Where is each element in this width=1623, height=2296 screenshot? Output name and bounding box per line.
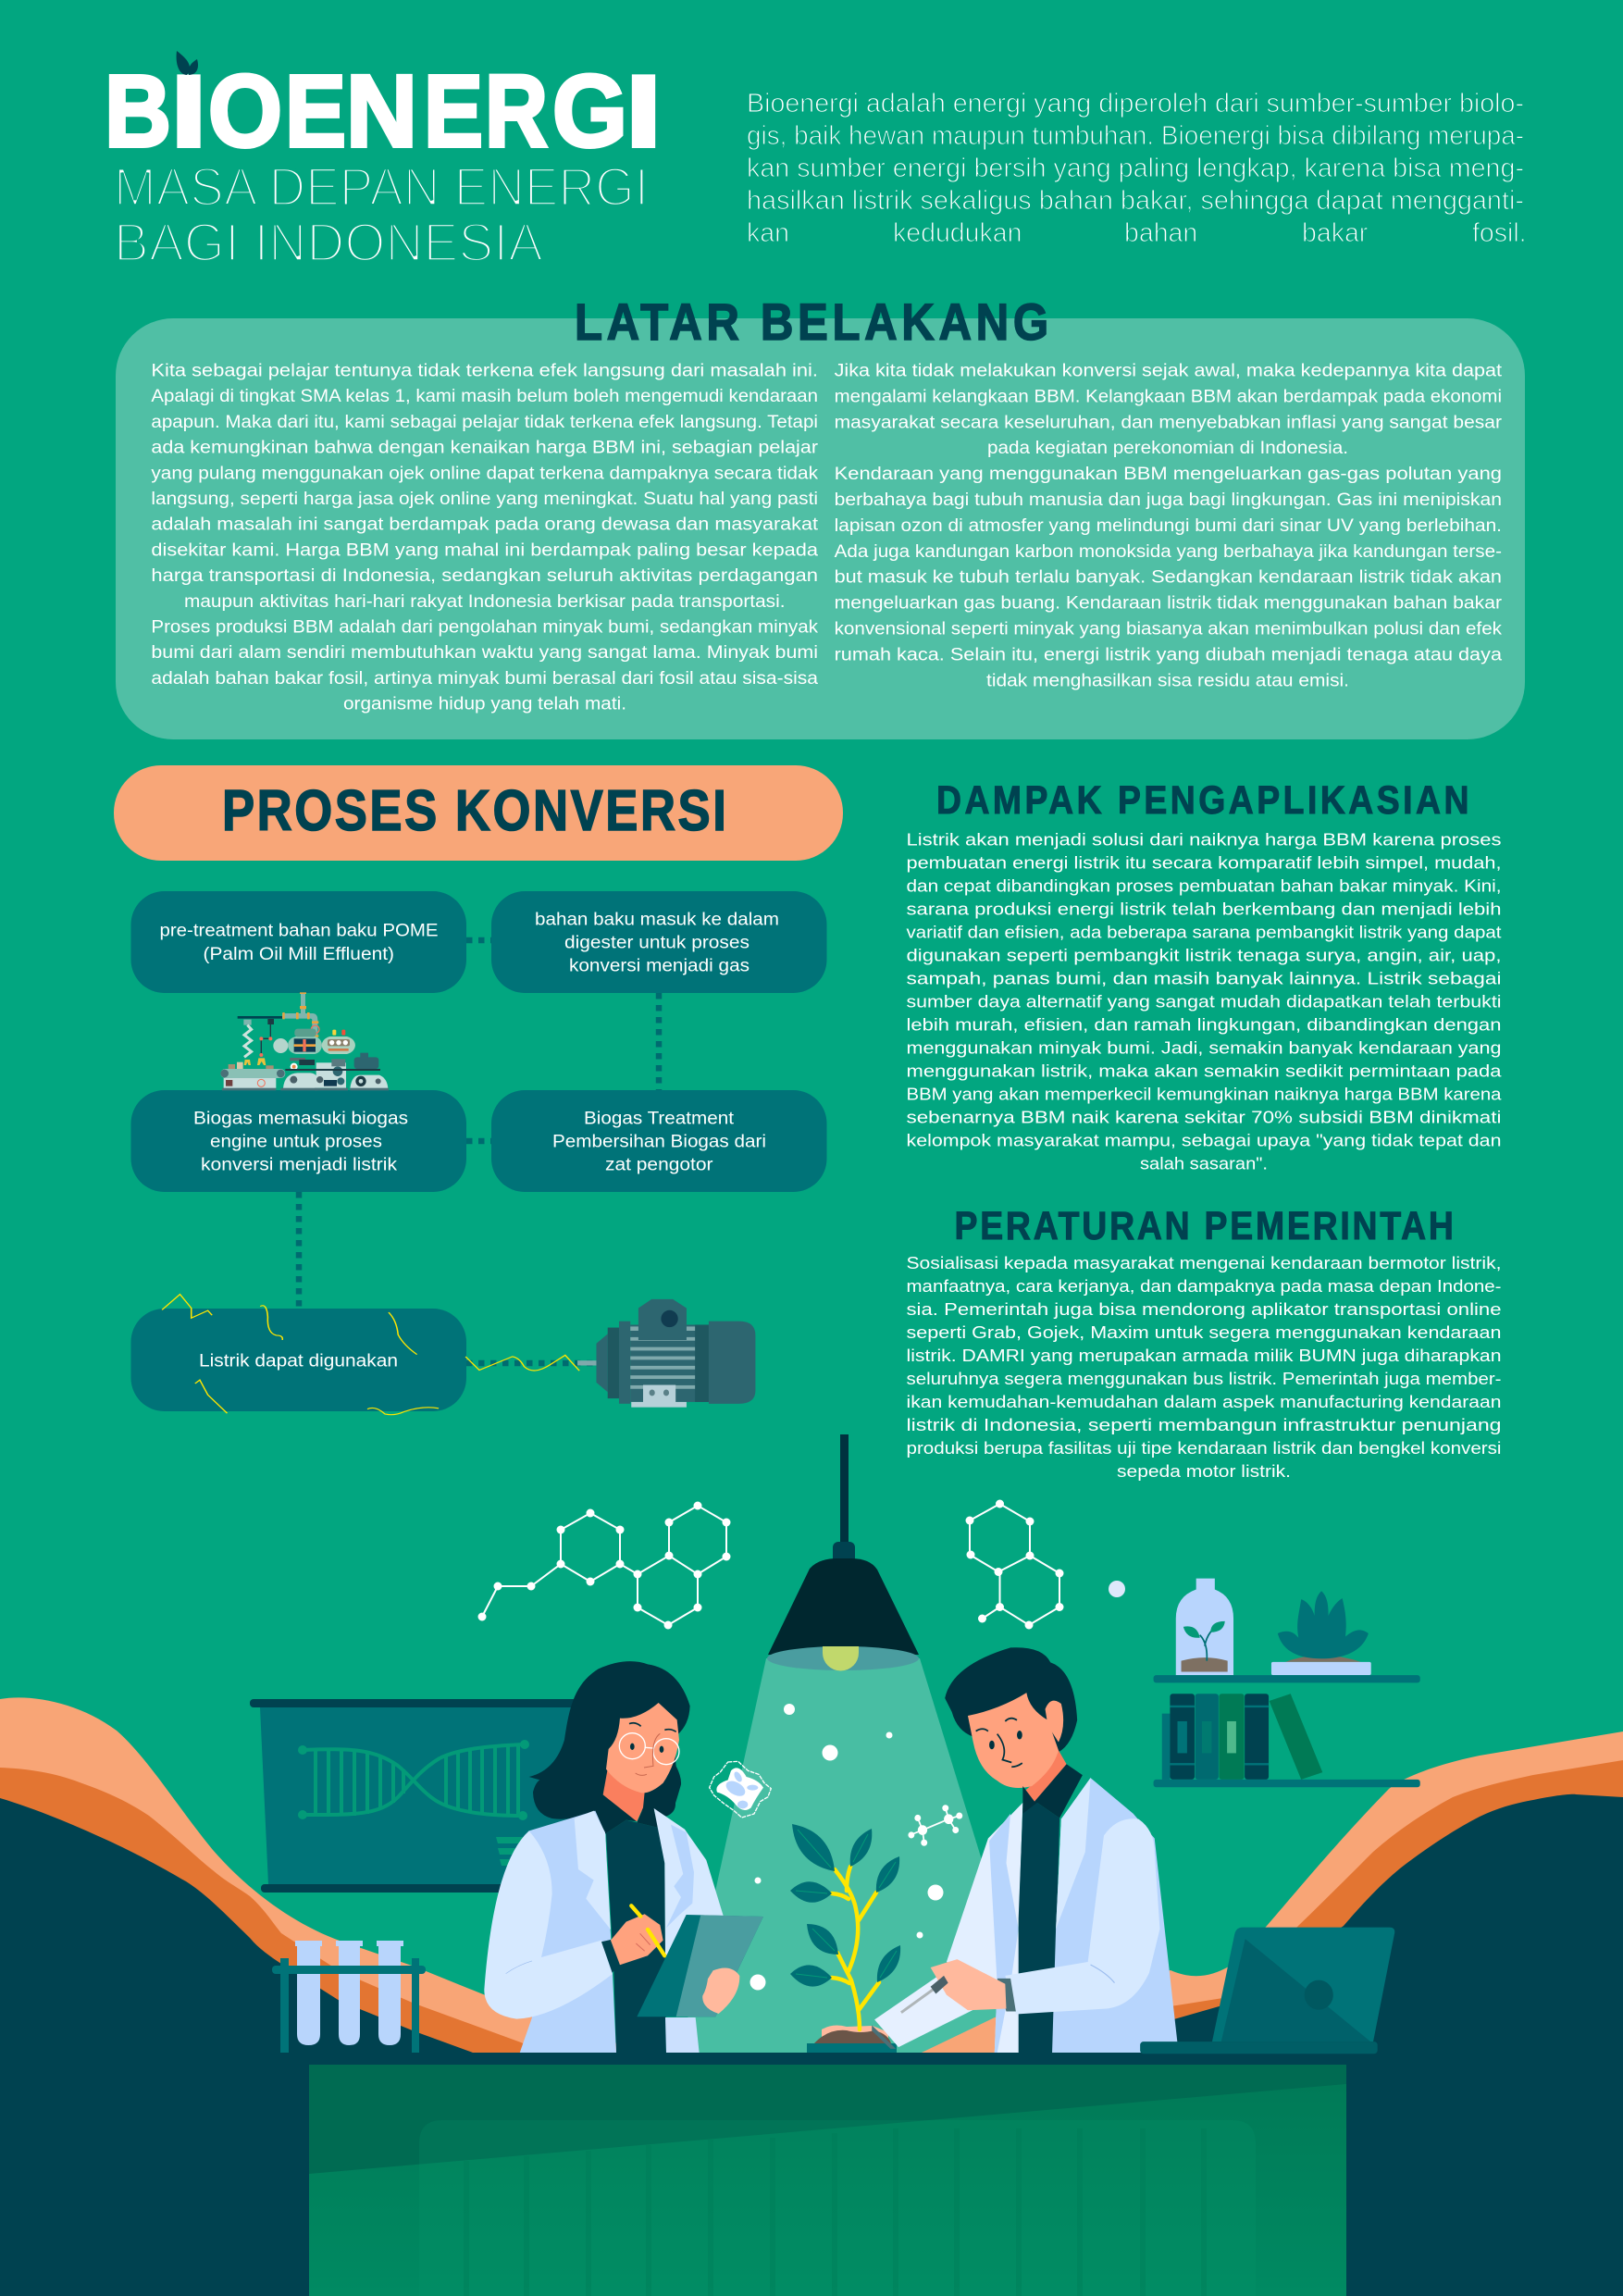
text block: peraturan: manfaatnya, cara kerjanya, dan dampaknya pada masa depan Indone- [907,1276,1501,1296]
title: BIOENERGI: N [346,55,417,168]
panel: latar belakang [116,293,1525,739]
intro text block: kan sumber energi bersih yang paling lengkap, karena bisa meng- [747,154,1524,183]
text block: dampak: Listrik akan menjadi solusi dari naiknya harga BBM karena proses [907,829,1501,849]
flow step: biogas engine: engine untuk proses [210,1133,382,1151]
hair [529,1661,690,1819]
text column left: bumi dari alam sendiri membutuhkan waktu yang sangat lama. Minyak bumi [151,643,818,663]
coat shade [520,1811,616,2053]
text block: dampak: variatif dan efisien, ada beberapa sarana pembangkit listrik yang dapat [907,922,1502,941]
heading pill: proses konversi: PROSES KONVERSI [222,779,726,843]
text column left: Proses produksi BBM adalah dari pengolahan minyak bumi, sedangkan minyak [151,618,819,637]
lamp [767,1434,919,1671]
books [1162,1694,1322,1780]
flow step: biogas treatment [491,1090,827,1192]
text column left: apapun. Maka dari itu, kami sebagai pelajar tidak terkena efek langsung. Tetapi [151,413,818,432]
flow step: digester: digester untuk proses [564,933,750,953]
text block: peraturan: Sosialisasi kepada masyarakat mengenai kendaraan bermotor listrik, [907,1253,1501,1272]
other hand [702,1967,739,2014]
small molecule in light [908,1805,962,1846]
dropper [901,1990,934,2013]
subtitle [114,157,649,273]
woman scientist [484,1661,763,2053]
text column right: Jika kita tidak melakukan konversi sejak awal, maka kedepannya kita dapat [835,361,1503,381]
text block: dampak: pembuatan energi listrik itu secara komparatif lebih simpel, mudah, [907,852,1501,872]
text column right: tidak menghasilkan sisa residu atau emisi. [986,671,1349,690]
sleeve [1005,1818,1159,2014]
text column left: Kita sebagai pelajar tentunya tidak terkena efek langsung dari masalah ini. [151,361,818,381]
text block: peraturan: ikan kemudahan-kemudahan dalam aspek manufacturing kendaraan [907,1392,1501,1411]
text block: dampak: sampah, panas bumi, dan masih banyak lainnya. Listrik sebagai [907,968,1501,987]
text column right: masyarakat secara keseluruhan, dan menyebabkan inflasi yang sangat besar [835,413,1503,432]
right coat [1052,1778,1179,2053]
text column left: adalah masalah ini sangat berdampak pada orang dewasa dan masyarakat [151,515,819,535]
heading: latar belakang: LATAR BELAKANG [575,293,1048,352]
counter desk [0,2053,1623,2296]
text block: dampak: digunakan seperti pembangkit listrik tenaga surya, angin, air, uap, [907,945,1501,964]
text block: dampak: dan cepat dibandingkan proses pembuatan bahan bakar minyak. Kini, [907,875,1501,895]
text block: peraturan: produksi berupa fasilitas uji tipe kendaraan listrik dan bengkel konversi [907,1438,1501,1458]
flow step: pre-treatment [131,891,466,993]
text block: dampak [907,829,1502,1173]
text column left: langsung, seperti harga jasa ojek online yang meningkat. Suatu hal yang pasti [151,490,818,509]
intro text block [747,89,1527,248]
cuff [997,1979,1016,2011]
subtitle: BAGI INDONESIA [114,213,543,273]
bacterium icon [710,1761,771,1818]
intro text block: kan [747,218,789,248]
title: BIOENERGI: I [626,55,662,168]
text column left: harga transportasi di Indonesia, sedangkan seluruh aktivitas perdagangan [151,566,818,586]
flow step: pre-treatment: pre-treatment bahan baku POME [159,922,439,941]
heading: dampak pengaplikasian: DAMPAK PENGAPLIKASIAN [936,779,1469,823]
text block: dampak: salah sasaran". [1140,1153,1268,1173]
intro text block: gis, baik hewan maupun tumbuhan. Bioenergi bisa dibilang merupa- [747,121,1524,151]
text column left: Apalagi di tingkat SMA kelas 1, kami masih belum boleh mengemudi kendaraan [151,387,818,406]
icon: factory machine [220,992,389,1090]
text column right: lapisan ozon di atmosfer yang melindungi bumi dari sinar UV yang berlebihan. [835,516,1502,536]
text block: peraturan: seperti Grab, Gojek, Maxim untuk segera menggunakan kendaraan [907,1322,1501,1342]
flow step: listrik [131,1309,466,1411]
hair back [945,1647,1077,1752]
text column right: konvensional seperti minyak yang biasanya akan menimbulkan polusi dan efek [835,620,1503,639]
face [606,1703,679,1793]
left coat [947,1803,1022,2053]
right coat [654,1808,724,1955]
jar with sprout [1176,1579,1233,1675]
text column right: berbahaya bagi tubuh manusia dan juga bagi lingkungan. Gas ini menipiskan [835,490,1502,510]
cuff [601,1940,619,1973]
plant [790,1824,900,2053]
flow step: digester: bahan baku masuk ke dalam [535,910,779,929]
light cone from lamp [680,1658,1041,2053]
shirt [1019,1803,1059,2053]
text column right: Ada juga kandungan karbon monoksida yang berbahaya jika kandungan terse- [835,542,1502,562]
subtitle: MASA DEPAN ENERGI [114,157,649,217]
flow step: digester [491,891,827,993]
text column left: organisme hidup yang telah mati. [343,695,626,714]
collar [594,1794,659,1834]
intro text block: Bioenergi adalah energi yang diperoleh dari sumber-sumber biolo- [747,89,1524,118]
hand [931,1959,1006,2010]
text block: peraturan: sia. Pemerintah juga bisa mendorong aplikator transportasi online [907,1299,1501,1319]
flow step: biogas engine: Biogas memasuki biogas [193,1109,408,1129]
face [968,1693,1059,1788]
title: BIOENERGI: E [424,55,483,168]
intro text block: fosil. [1472,218,1527,248]
text column left: disekitar kami. Harga BBM yang mahal ini berdampak paling besar kepada [151,540,818,560]
floating dot [1109,1581,1125,1597]
text column right: pada kegiatan perekonomian di Indonesia. [987,439,1348,458]
intro text block: kedudukan [893,218,1022,248]
flow step: biogas engine: konversi menjadi listrik [201,1155,398,1175]
intro text block: bakar [1302,218,1369,248]
text block: peraturan: listrik. DAMRI yang merupakan armada milik BUMN juga diharapkan [907,1346,1501,1365]
text column right: Kendaraan yang menggunakan BBM mengeluarkan gas-gas polutan yang [835,465,1502,484]
text block: dampak: BBM yang akan memperkecil kemungkinan naiknya harga BBM karena [907,1084,1502,1103]
text block: peraturan: sepeda motor listrik. [1117,1461,1291,1481]
text block: dampak: sarana produksi energi listrik telah berkembang dan menjadi lebih [907,899,1501,918]
flow step: biogas engine [131,1090,466,1192]
left lapel [575,1811,611,1930]
flow step: biogas treatment: Pembersihan Biogas dari [552,1133,766,1151]
laptop [1140,1928,1394,2054]
background waves and hills [0,1697,1623,2296]
intro text block: hasilkan listrik sekaligus bahan bakar, sehingga dapat mengganti- [747,186,1524,216]
text column right: but masuk ke tubuh terlalu banyak. Sedangkan kendaraan listrik tidak akan [835,568,1502,588]
text block: dampak: kelompok masyarakat mampu, sebagai upaya "yang tidak tepat dan [907,1130,1501,1149]
DNA helix [303,1744,523,1816]
intro text block: bahan [1124,218,1197,248]
title: BIOENERGI: G [552,55,627,168]
flow step: pre-treatment: (Palm Oil Mill Effluent) [204,945,394,964]
text column left [151,361,819,714]
flow step: biogas treatment: zat pengotor [605,1155,713,1175]
title: BIOENERGI [105,51,662,168]
title: BIOENERGI: R [485,55,548,168]
flow step: listrik: Listrik dapat digunakan [199,1352,398,1371]
electric squiggles [162,1295,579,1415]
heading pill: proses konversi [114,765,843,861]
heading: peraturan pemerintah: PERATURAN PEMERINTAH [955,1205,1454,1248]
floating light dots [750,1704,944,1990]
man scientist [872,1647,1179,2053]
bookshelf [1154,1579,1420,1787]
title: BIOENERGI: B [105,55,171,168]
sleeve [484,1831,613,2019]
succulent [1271,1591,1371,1675]
text block: dampak: sumber daya alternatif yang sangat mudah didapatkan telah terbukti [907,991,1501,1011]
text block: dampak: menggunakan listrik, maka akan semakin sedikit permintaan pada [907,1061,1502,1080]
text block: peraturan [907,1253,1501,1481]
molecule left [477,1501,731,1629]
text column left: adalah bahan bakar fosil, artinya minyak bumi berasal dari fosil atau sisa-sisa [151,669,818,689]
shirt [605,1820,666,2053]
text column right: rumah kaca. Selain itu, energi listrik yang diubah menjadi tenaga atau daya [835,645,1502,664]
title: BIOENERGI: I [170,55,207,168]
collar [1022,1764,1083,1818]
text column left: maupun aktivitas hari-hari rakyat Indonesia berkisar pada transportasi. [184,592,785,612]
text column right: mengalami kelangkaan BBM. Kelangkaan BBM akan berdampak pada ekonomi [835,387,1502,406]
title: BIOENERGI: E [285,55,346,168]
test tubes rack [272,1941,426,2053]
desk front panel [419,2120,1256,2296]
eyes and glasses [619,1723,679,1775]
text column right: mengeluarkan gas buang. Kendaraan listrik tidak menggunakan bahan bakar [835,594,1503,614]
clipboard [637,1915,763,2017]
text column right [835,361,1503,690]
text column left: ada kemungkinan bahwa dengan kenaikan harga BBM ini, sebagian pelajar [151,439,819,458]
text block: dampak: lebih murah, efisien, dan ramah lingkungan, dibandingkan dengan [907,1014,1501,1034]
neck [1023,1750,1067,1803]
text block: peraturan: seluruhnya segera menggunakan bus listrik. Pemerintah juga member- [907,1369,1501,1388]
text block: dampak: sebenarnya BBM naik karena sekitar 70% subsidi BBM dinikmati [907,1107,1501,1126]
paper [874,1970,981,2047]
icon: electric motor [577,1299,755,1408]
flow step: digester: konversi menjadi gas [569,957,750,975]
neck [603,1769,645,1821]
flow connectors [299,940,659,1363]
molecule right [966,1499,1064,1629]
flow step: biogas treatment: Biogas Treatment [584,1109,735,1129]
whiteboard with DNA [250,1699,592,1893]
text block: dampak: menggunakan minyak bumi. Jadi, semakin banyak kendaraan yang [907,1037,1501,1057]
title: BIOENERGI: O [208,55,282,168]
hand with pen [611,1905,664,1965]
text column left: yang pulang menggunakan ojek online dapat terkena dampaknya secara tidak [151,464,819,483]
text block: peraturan: listrik di Indonesia, seperti membangun infrastruktur penunjang [907,1415,1501,1434]
